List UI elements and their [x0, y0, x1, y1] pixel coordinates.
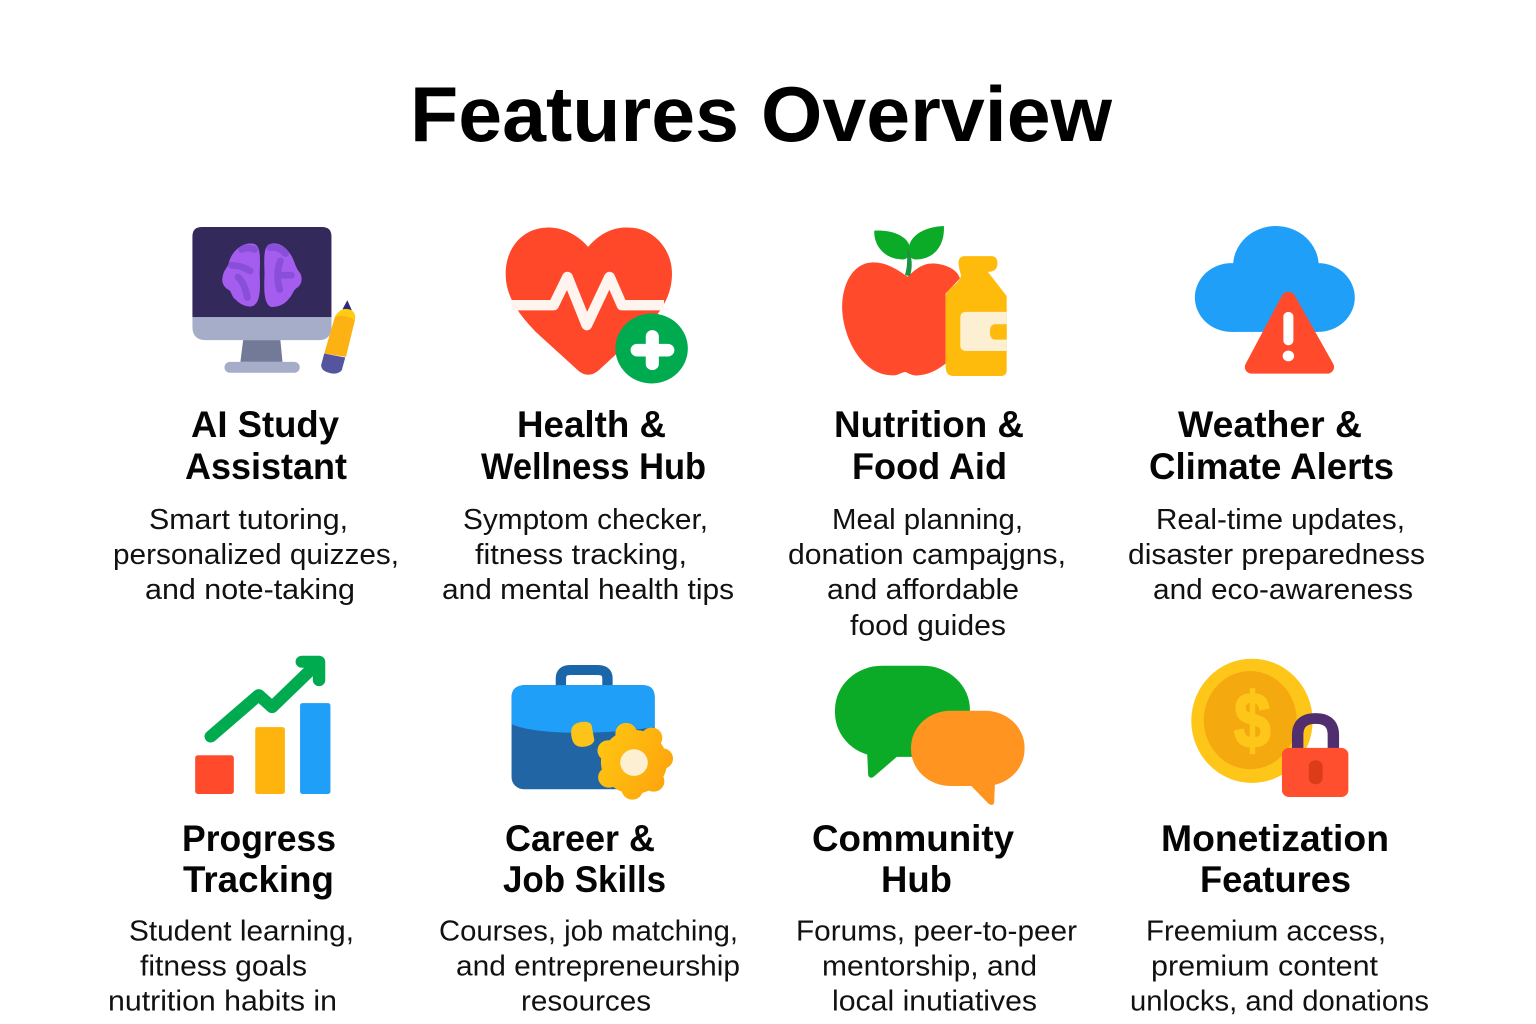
- text: Community Hub description: Forums, peer-to-peer: [796, 916, 1077, 948]
- text: Weather & Climate Alerts description: [1128, 504, 1425, 606]
- text: Weather & Climate Alerts description: Real-time updates,: [1156, 504, 1405, 536]
- panel: Health & Wellness Hub: [442, 228, 734, 606]
- icon: coin with padlock: [1191, 659, 1348, 797]
- text: Career & Job Skills description: and entrepreneurship: [456, 950, 740, 982]
- text: Career & Job Skills description: resources: [521, 986, 651, 1018]
- heading: Weather & Climate Alerts: Weather &: [1178, 404, 1362, 445]
- panel: Progress Tracking: [108, 662, 354, 1018]
- panel: AI Study Assistant: [113, 227, 399, 606]
- icon: apple and bottle: [842, 226, 1007, 376]
- title: Features Overview: [410, 70, 1112, 158]
- text: Nutrition & Food Aid description: and affordable: [827, 574, 1019, 606]
- text: Health & Wellness Hub description: Symptom checker,: [463, 504, 708, 536]
- heading: Career & Job Skills: Job Skills: [503, 859, 666, 900]
- heading: Nutrition & Food Aid: Nutrition &: [834, 404, 1024, 445]
- text: Community Hub description: local inutiatives: [832, 986, 1037, 1018]
- heading: Monetization Features: Features: [1200, 859, 1351, 900]
- heading: Progress Tracking: Tracking: [183, 859, 334, 900]
- heading: Weather & Climate Alerts: Climate Alerts: [1149, 446, 1394, 487]
- heading: Nutrition & Food Aid: [834, 404, 1024, 487]
- text: Progress Tracking description: fitness goals: [140, 950, 307, 982]
- text: Nutrition & Food Aid description: food guides: [850, 610, 1006, 642]
- icon: monitor with brain and pencil: [192, 227, 355, 374]
- heading: Career & Job Skills: Career &: [505, 818, 655, 859]
- text: AI Study Assistant description: personalized quizzes,: [113, 539, 399, 571]
- text: Progress Tracking description: nutrition habits in: [108, 986, 337, 1018]
- text: Career & Job Skills description: [439, 916, 740, 1018]
- text: Monetization Features description: premium content: [1151, 950, 1378, 982]
- heading: Progress Tracking: [182, 818, 336, 900]
- heading: Nutrition & Food Aid: Food Aid: [852, 446, 1007, 487]
- panel: Monetization Features: [1130, 659, 1429, 1018]
- heading: Community Hub: [812, 818, 1014, 900]
- text: Weather & Climate Alerts description: disaster preparedness: [1128, 539, 1425, 571]
- text: Progress Tracking description: [108, 916, 354, 1018]
- text: Nutrition & Food Aid description: Meal planning,: [832, 504, 1023, 536]
- heading: Progress Tracking: Progress: [182, 818, 336, 859]
- text: Community Hub description: [796, 916, 1077, 1018]
- text: AI Study Assistant description: [113, 504, 399, 606]
- panel: Nutrition & Food Aid: [788, 226, 1066, 642]
- heading: Community Hub: Hub: [881, 859, 952, 900]
- text: Health & Wellness Hub description: [442, 504, 734, 606]
- icon: briefcase with gear: [512, 670, 673, 800]
- text: Nutrition & Food Aid description: donation campajgns,: [788, 539, 1066, 571]
- heading: Health & Wellness Hub: Health &: [517, 404, 666, 445]
- heading: AI Study Assistant: [185, 404, 347, 487]
- heading: Health & Wellness Hub: [481, 404, 706, 487]
- text: AI Study Assistant description: and note-taking: [145, 574, 355, 606]
- panel: Career & Job Skills: [439, 670, 740, 1018]
- icon: cloud with warning triangle: [1195, 226, 1355, 367]
- text: AI Study Assistant description: Smart tutoring,: [149, 504, 348, 536]
- text: Health & Wellness Hub description: fitness tracking,: [475, 539, 687, 571]
- heading: Monetization Features: Monetization: [1161, 818, 1389, 859]
- text: Career & Job Skills description: Courses, job matching,: [439, 916, 738, 948]
- icon: speech bubbles: [835, 666, 1025, 805]
- text: Community Hub description: mentorship, and: [822, 950, 1037, 982]
- text: Monetization Features description: [1130, 916, 1429, 1018]
- text: Progress Tracking description: Student learning,: [129, 916, 354, 948]
- heading: Career & Job Skills: [503, 818, 666, 900]
- heading: Monetization Features: [1161, 818, 1389, 900]
- text: Weather & Climate Alerts description: and eco-awareness: [1153, 574, 1413, 606]
- icon: heart with pulse and plus: [506, 228, 688, 383]
- panel: Community Hub: [796, 666, 1077, 1018]
- text: Monetization Features description: unlocks, and donations: [1130, 986, 1429, 1018]
- panel: Weather & Climate Alerts: [1128, 226, 1425, 606]
- heading: AI Study Assistant: AI Study: [191, 404, 339, 445]
- heading: Community Hub: Community: [812, 818, 1014, 859]
- text: Nutrition & Food Aid description: [788, 504, 1066, 642]
- text: Health & Wellness Hub description: and mental health tips: [442, 574, 734, 606]
- icon: bar chart with rising arrow: [195, 662, 330, 794]
- heading: Health & Wellness Hub: Wellness Hub: [481, 446, 706, 487]
- icon: coin with padlock: $: [1234, 677, 1271, 764]
- text: Monetization Features description: Freemium access,: [1146, 916, 1386, 948]
- heading: AI Study Assistant: Assistant: [185, 446, 347, 487]
- heading: Weather & Climate Alerts: [1149, 404, 1394, 487]
